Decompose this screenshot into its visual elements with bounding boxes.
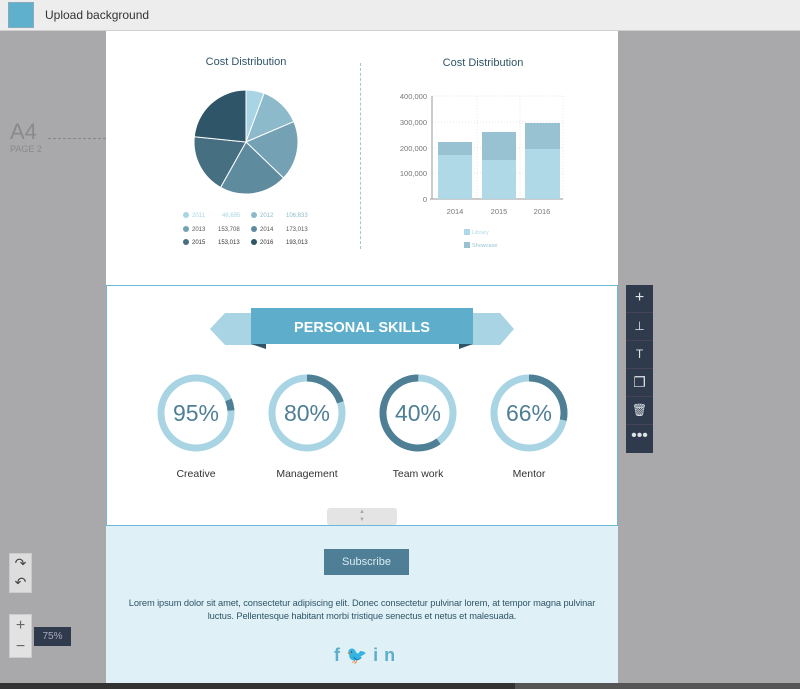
banner [210,308,514,349]
page [106,31,618,689]
pie chart [183,90,308,246]
bar chart: 200,000 [400,144,427,153]
pie chart: 46,695 [222,213,241,219]
banner: PERSONAL SKILLS [294,320,430,336]
panel: charts [183,56,564,249]
toolbar [626,285,653,453]
skill rings: 95% [173,400,219,426]
toolbar: ❐ [633,374,646,390]
pie chart: 2014 [260,227,274,233]
resize handle: ▲ [359,509,365,515]
pie chart: 193,013 [286,240,308,246]
toolbar: ••• [631,427,648,444]
pie chart: 2013 [192,227,206,233]
icon: background swatch [8,2,34,28]
skill rings: 66% [506,400,552,426]
bar chart: 300,000 [400,118,427,127]
pie chart: 106,833 [286,213,308,219]
page label A4: PAGE 2 [10,144,42,154]
undo redo [9,553,32,593]
pie chart: 2012 [260,213,274,219]
bar chart: 0 [423,195,427,204]
undo redo: ↶ [15,574,26,590]
toolbar: T [636,347,643,361]
pie chart: 2016 [260,240,274,246]
undo redo: ↷ [15,555,26,571]
bottom scrollbar [0,683,800,689]
bar chart: 400,000 [400,92,427,101]
upload background text: Upload background [45,8,149,22]
zoom controls: − [16,638,25,655]
pie chart title: Cost Distribution [206,56,286,68]
skill rings: 80% [284,400,330,426]
top bar [0,0,800,31]
bar chart title: Cost Distribution [443,57,523,69]
bar chart [400,92,564,249]
pie chart: 153,708 [218,227,240,233]
panel: subscribe footer [106,526,618,689]
page label A4 [10,119,42,154]
bar chart: 100,000 [400,169,427,178]
bar chart: Library [472,230,489,236]
skill rings: Mentor [513,468,546,480]
bar chart: 2016 [534,207,550,216]
skill rings: Creative [176,468,216,480]
zoom controls [9,614,32,658]
pie chart: 2015 [192,240,206,246]
social icons: f🐦in [334,645,401,665]
body text: Lorem ipsum dolor sit amet, consectetur adipiscing elit. Donec consectetur pulvinar lorem, at tempor magna pulvinar luctus. Pellentesque habitant morbi tristique senectus et netus et malesuada. [129,598,595,621]
skill rings: 40% [395,400,441,426]
subscribe button [324,549,409,575]
skill rings [158,374,568,480]
bar chart: 2015 [491,207,507,216]
subscribe button: Subscribe [342,556,391,568]
skill rings: Management [276,468,338,480]
bar chart: 2014 [447,207,463,216]
pie chart: 153,013 [218,240,240,246]
divider [360,63,361,249]
resize handle [327,508,397,525]
zoom level label [34,627,71,646]
panel: personal skills [106,285,618,526]
zoom controls: + [16,617,25,634]
pie chart: 173,013 [286,227,308,233]
toolbar: ⊥ [634,319,645,333]
skill rings: Team work [393,468,444,480]
pie chart: 2011 [192,213,206,219]
toolbar: + [635,289,644,306]
page label A4: A4 [10,119,37,144]
toolbar: 🗑 [632,403,647,417]
resize handle: ▼ [359,517,365,523]
bar chart: Showcase [472,243,497,249]
zoom level label: 75% [42,631,62,642]
